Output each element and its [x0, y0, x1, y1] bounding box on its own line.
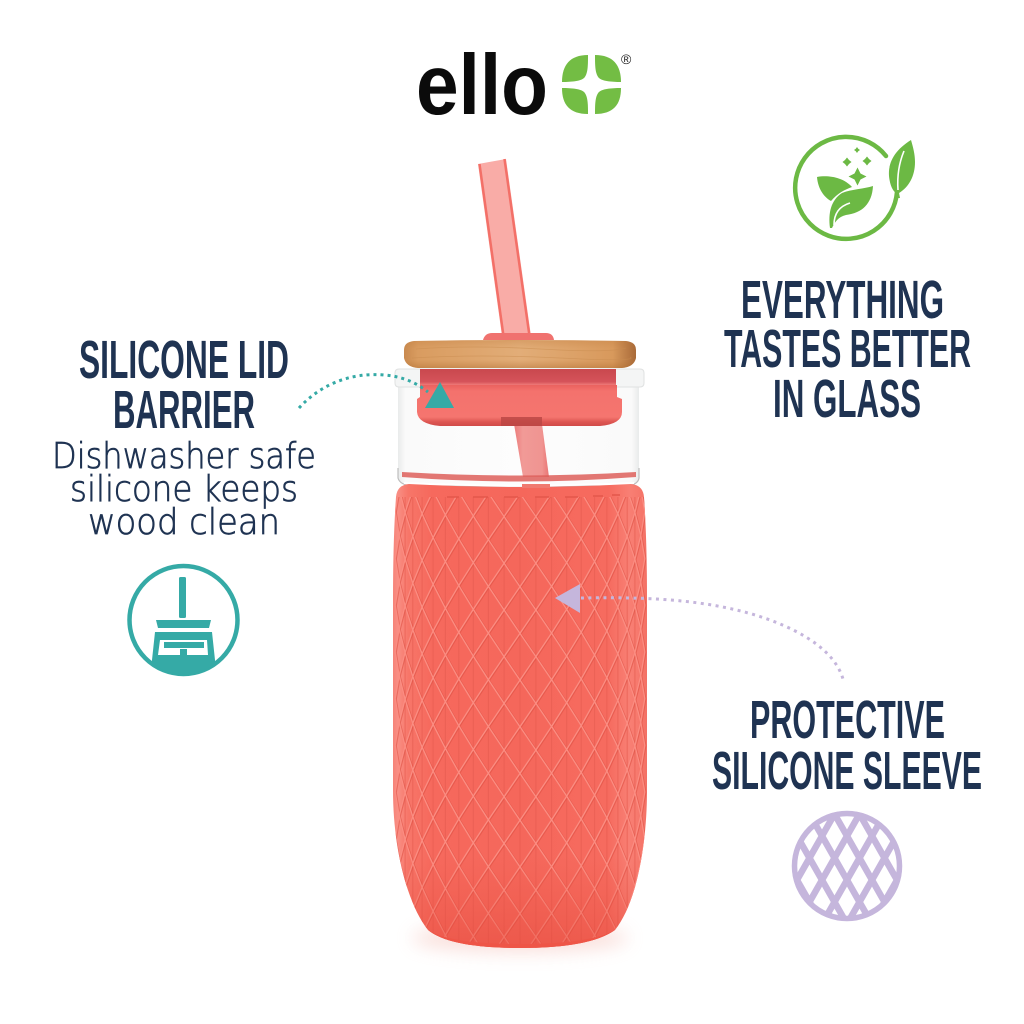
text: dishwasher safe description: wood clean	[88, 502, 280, 543]
logo: ello: ello	[416, 38, 548, 133]
heading: everything tastes better in glass	[724, 270, 971, 429]
heading: silicone lid barrier: BARRIER	[113, 380, 255, 440]
top ridge segments	[447, 495, 620, 497]
diamond lattice shadows	[396, 497, 646, 946]
heading: silicone lid barrier	[79, 330, 289, 440]
diamond lattice ridges	[395, 497, 646, 946]
bamboo lid	[404, 340, 636, 368]
icon: lilac lattice circle	[790, 810, 904, 922]
straw lower	[514, 424, 549, 477]
glass body	[398, 387, 639, 485]
text: dishwasher safe description	[52, 436, 316, 543]
glass rim	[395, 369, 644, 387]
shadow under tumbler	[412, 924, 628, 952]
silicone sleeve	[393, 484, 647, 948]
lid knob	[483, 333, 554, 340]
heading: silicone lid barrier: SILICONE LID	[79, 330, 289, 390]
icon: broom in circle	[130, 566, 238, 680]
text: dishwasher safe description: Dishwasher safe	[52, 436, 316, 477]
vertical facet lines	[405, 469, 635, 960]
sleeve base shading	[406, 878, 636, 948]
sleeve pattern	[395, 497, 646, 948]
silicone gasket lower	[417, 385, 622, 426]
straw foot notch	[522, 484, 550, 488]
logo: ello: ®	[621, 51, 632, 67]
logo: ello	[416, 38, 632, 133]
glass base reflection	[398, 468, 639, 486]
silicone gasket upper	[420, 369, 616, 385]
text: dishwasher safe description: silicone keeps	[70, 469, 298, 510]
straw upper edges	[480, 159, 530, 336]
gasket centre shade	[501, 417, 542, 426]
arrow: dotted lilac line to sleeve	[555, 584, 843, 679]
straw upper	[478, 159, 531, 336]
heading: everything tastes better in glass: IN GLASS	[773, 369, 921, 429]
heading: protective silicone sleeve	[712, 690, 982, 801]
icon: leaves in circle	[795, 137, 915, 239]
tumbler product	[390, 159, 650, 961]
arrow: dotted teal line to lid	[299, 375, 454, 408]
